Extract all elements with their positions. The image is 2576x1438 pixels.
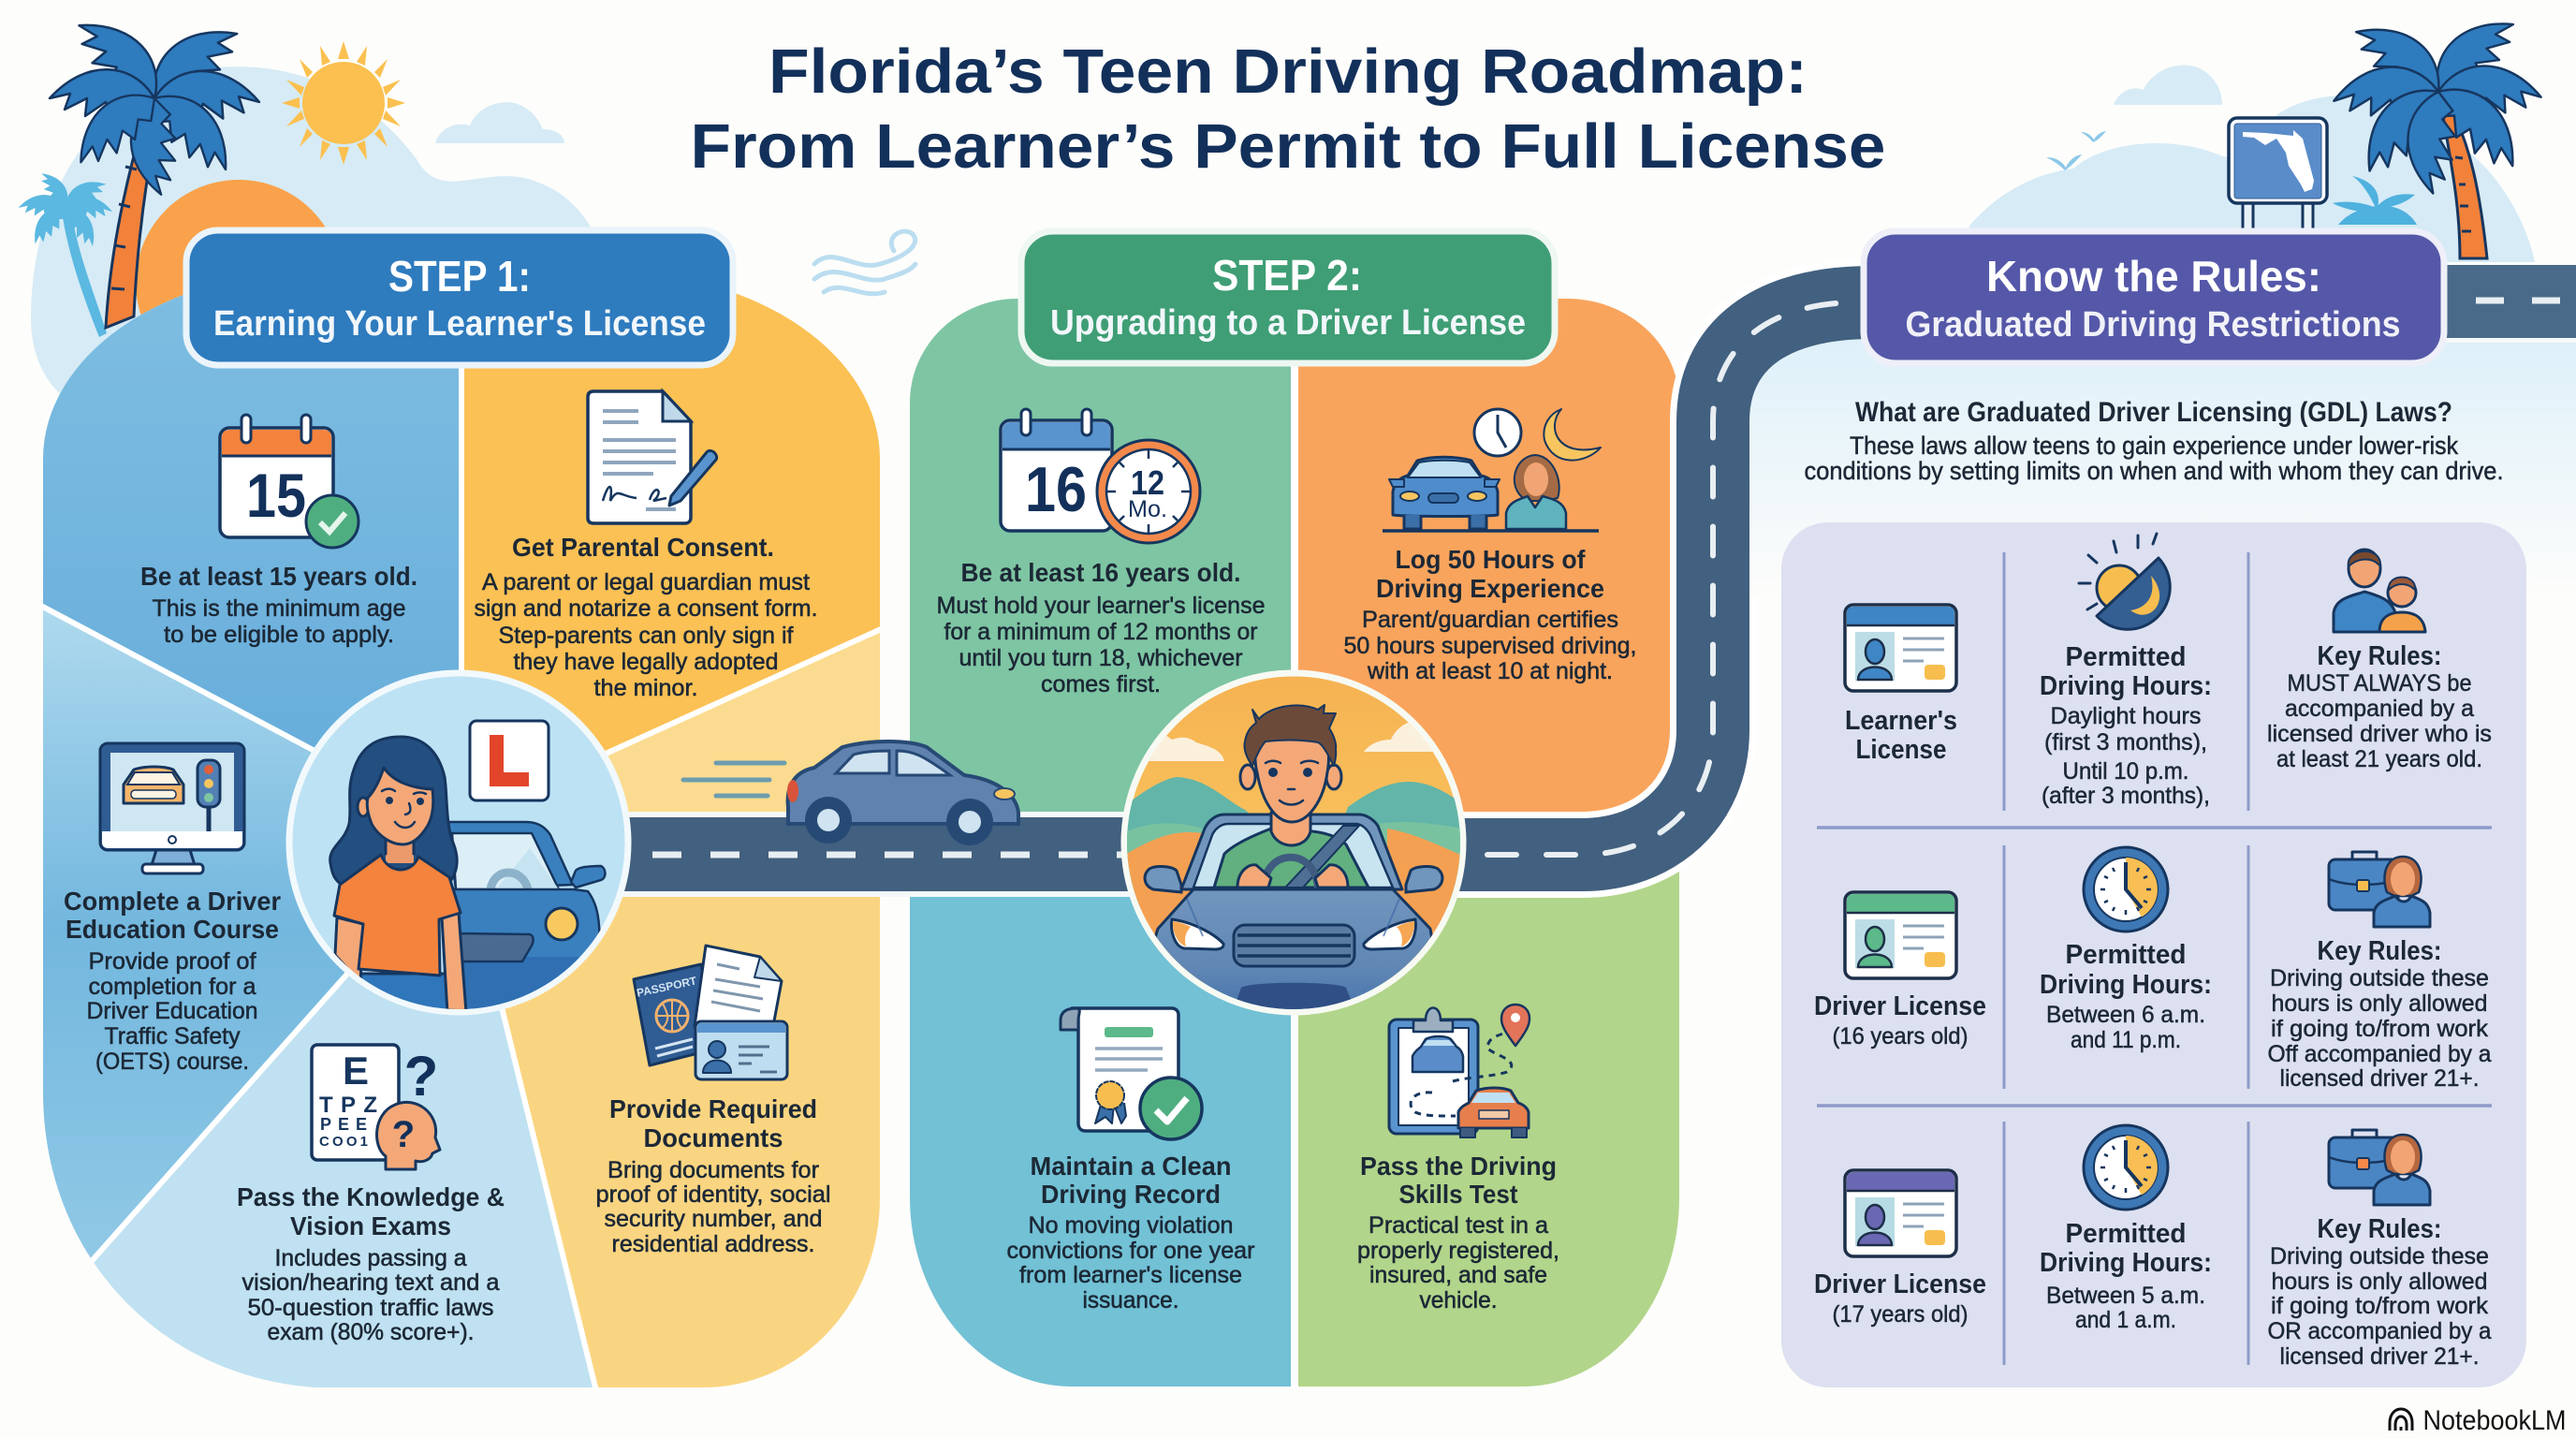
icon: briefcase and person — [2329, 852, 2430, 927]
row: learner's license: Daylight hours — [2050, 703, 2202, 729]
panel: step 2 quadrant background — [899, 290, 1688, 1398]
panel text and icon: driver education course: (OETS) course. — [95, 1049, 249, 1075]
panel text and icon: log 50 hours: 50 hours supervised driving, — [1344, 633, 1636, 659]
heading: know the rules: Graduated Driving Restrictions — [1906, 305, 2400, 345]
decoration: small cloud — [435, 102, 564, 143]
panel text and icon: driver education course: Complete a Driver — [64, 887, 281, 916]
panel text and icon: log 50 hours: with at least 10 at night. — [1367, 658, 1613, 684]
icon: sun and moon — [2079, 534, 2170, 629]
icon: computer monitor with car and traffic light — [100, 743, 244, 873]
icon: signed document with pen — [588, 391, 717, 523]
panel text and icon: driving skills test: vehicle. — [1419, 1287, 1498, 1313]
icon: purple license card — [1845, 1170, 1956, 1256]
decoration: orange setting sun — [136, 180, 342, 386]
icon: moving car with speed lines — [683, 741, 1018, 845]
row: driver license 17: Between 5 a.m. — [2046, 1283, 2205, 1309]
panel text and icon: be at least 16: Must hold your learner's license — [936, 593, 1266, 619]
row: driver license 17: OR accompanied by a — [2267, 1318, 2492, 1344]
icon: eye chart and head with question marks: TPZ — [319, 1093, 377, 1118]
heading: step 1: STEP 1: — [388, 252, 531, 301]
panel text and icon: required documents: Provide Required — [609, 1094, 817, 1123]
panel text and icon: be at least 16: for a minimum of 12 months or — [944, 619, 1258, 645]
panel text and icon: required documents: security number, and — [605, 1206, 822, 1232]
row: driver license 17: Driving Hours: — [2040, 1248, 2212, 1278]
icon: large palm tree right — [2332, 4, 2542, 258]
hub: teen girl with learner car — [289, 673, 628, 1020]
row: learner's license: (after 3 months), — [2042, 783, 2210, 809]
panel text and icon: driver education course: Provide proof of — [88, 948, 256, 975]
panel text and icon: driving skills test: Pass the Driving — [1360, 1152, 1557, 1181]
panel text and icon: knowledge and vision exams: vision/hearing text and a — [242, 1269, 500, 1296]
row: driver license 16: Driving Hours: — [2040, 970, 2212, 1000]
icon: small palm behind sign — [2333, 176, 2417, 225]
panel text and icon: knowledge and vision exams: Vision Exams — [290, 1211, 451, 1240]
panel text and icon: required documents: Bring documents for — [607, 1157, 819, 1183]
title: Florida’s Teen Driving Roadmap: — [768, 37, 1808, 107]
title: From Learner’s Permit to Full License — [691, 111, 1885, 182]
row: learner's license: (first 3 months), — [2044, 729, 2207, 756]
row: learner's license: licensed driver who is — [2267, 721, 2492, 747]
heading: step 2: Upgrading to a Driver License — [1050, 303, 1526, 343]
row: learner's license: Learner's — [1845, 706, 1957, 736]
row: learner's license: accompanied by a — [2285, 696, 2474, 722]
decoration: cloud — [2114, 66, 2222, 105]
car hood and front — [1155, 888, 1432, 1009]
text block: what are GDL laws — [1805, 397, 2503, 485]
icon: calendar 15 — [220, 415, 359, 548]
panel text and icon: parental consent: Step-parents can only sign if — [498, 623, 794, 649]
panel text and icon: driver education course: Driver Education — [86, 998, 258, 1024]
car behind the girl — [447, 822, 605, 1020]
icon: clipboard, route and cars — [1389, 1005, 1530, 1137]
icon: Florida road sign — [2229, 118, 2327, 233]
title — [691, 37, 1885, 182]
panel text and icon: be at least 16: comes first. — [1041, 671, 1161, 697]
panel text and icon: driver education course: Traffic Safety — [105, 1023, 241, 1049]
icon: eye chart and head with question marks: PEE — [320, 1115, 367, 1134]
panel text and icon: parental consent: the minor. — [593, 675, 698, 701]
row: driver license 17: Key Rules: — [2318, 1214, 2441, 1244]
road: exit to right edge — [2434, 265, 2576, 343]
row: driver license 17: hours is only allowed — [2271, 1269, 2488, 1295]
text block: what are GDL laws: These laws allow teens to gain experience under lower-risk — [1850, 432, 2458, 460]
panel: step 1 segmented background — [28, 262, 899, 1404]
row: driver license 17 — [1814, 1125, 2492, 1370]
row: driver license 17: and 1 a.m. — [2075, 1307, 2176, 1333]
icon: car, parent, clock and moon — [1383, 409, 1601, 531]
row: learner's license — [1845, 534, 2492, 809]
panel text and icon: parental consent: A parent or legal guardian must — [482, 569, 810, 595]
car windshield frame — [1181, 814, 1402, 889]
icon: passport, paper and ID card: PASSPORT — [636, 974, 698, 1000]
panel text and icon: knowledge and vision exams: Includes passing a — [275, 1245, 467, 1271]
icon: learner's license card — [1845, 605, 1956, 691]
panel: graduated restrictions table — [1781, 522, 2526, 1387]
icon: adult and child — [2334, 550, 2425, 632]
panel text and icon: knowledge and vision exams — [237, 1045, 505, 1345]
icon: eye chart and head with question marks: E — [343, 1049, 369, 1093]
icon: eye chart and head with question marks: ? — [404, 1045, 438, 1108]
panel text and icon: required documents — [595, 946, 831, 1257]
panel text and icon: required documents: Documents — [644, 1123, 783, 1152]
row: driver license 16: hours is only allowed — [2271, 990, 2488, 1017]
heading: step 2: STEP 2: — [1212, 251, 1362, 300]
decoration: top-left tropical scene — [19, 5, 599, 412]
panel text and icon: be at least 16: Be at least 16 years old. — [960, 558, 1241, 587]
girl figure — [330, 737, 466, 1020]
road border: curve edge — [1442, 302, 1872, 855]
row: driver license 16: Between 6 a.m. — [2046, 1002, 2205, 1028]
row: driver license 17: Driver License — [1814, 1269, 1986, 1299]
panel text and icon: be at least 16: until you turn 18, whichever — [959, 645, 1243, 671]
panel text and icon: clean driving record: No moving violation — [1028, 1212, 1234, 1239]
icon: L plate — [470, 721, 549, 800]
icon: clock 5 to 1 — [2084, 1125, 2168, 1210]
panel text and icon: clean driving record: convictions for one year — [1007, 1238, 1254, 1264]
panel text and icon: log 50 hours: Driving Experience — [1376, 574, 1604, 603]
row: driver license 17: Permitted — [2065, 1219, 2187, 1249]
panel text and icon: log 50 hours: Parent/guardian certifies — [1362, 607, 1618, 633]
row: learner's license: Permitted — [2065, 642, 2187, 672]
icon: eye chart and head with question marks — [312, 1045, 440, 1169]
panel text and icon: log 50 hours — [1344, 409, 1636, 684]
panel text and icon: clean driving record — [1007, 1008, 1254, 1313]
row: driver license 17: Driving outside these — [2270, 1243, 2489, 1269]
row: learner's license: Until 10 p.m. — [2063, 758, 2188, 785]
panel text and icon: driver education course: Education Course — [66, 915, 279, 944]
row: driver license 16: if going to/from work — [2271, 1016, 2489, 1042]
panel text and icon: be at least 15: Be at least 15 years old. — [140, 562, 417, 591]
row: learner's license: Driving Hours: — [2040, 671, 2212, 701]
icon: eye chart and head with question marks: ? — [392, 1114, 415, 1155]
row: driver license 16: Driver License — [1814, 991, 1986, 1021]
driver — [1214, 705, 1368, 888]
row: driver license 16: Off accompanied by a — [2267, 1041, 2492, 1067]
panel text and icon: knowledge and vision exams: exam (80% score+). — [268, 1319, 474, 1345]
row: learner's license: at least 21 years old. — [2276, 746, 2482, 772]
row: driver license 16: and 11 p.m. — [2071, 1027, 2181, 1053]
icon: calendar 16 and 12 month clock: Mo. — [1128, 496, 1167, 522]
panel text and icon: driving skills test — [1357, 1005, 1559, 1313]
panel text and icon: driving skills test: insured, and safe — [1369, 1262, 1547, 1288]
heading: step 2 — [1021, 231, 1555, 363]
panel text and icon: clean driving record: Driving Record — [1041, 1180, 1221, 1209]
icon: clock 6 to 11 — [2084, 847, 2168, 932]
panel text and icon: driver education course — [64, 743, 281, 1075]
icon: green license card — [1845, 892, 1956, 978]
panel text and icon: parental consent — [474, 391, 818, 701]
heading: know the rules — [1864, 231, 2444, 363]
road: curve up to the rules header — [1442, 302, 1872, 855]
panel text and icon: clean driving record: Maintain a Clean — [1030, 1152, 1232, 1181]
panel text and icon: parental consent: sign and notarize a consent form. — [474, 595, 818, 622]
row: driver license 16 — [1814, 847, 2492, 1092]
text block: what are GDL laws: conditions by setting limits on when and with whom they can drive. — [1805, 457, 2503, 485]
panel text and icon: log 50 hours: Log 50 Hours of — [1395, 545, 1586, 574]
row: driver license 16: licensed driver 21+. — [2280, 1065, 2479, 1092]
panel text and icon: parental consent: Get Parental Consent. — [512, 533, 774, 562]
row: learner's license: Key Rules: — [2318, 641, 2441, 671]
row: driver license 17: (17 years old) — [1833, 1301, 1968, 1328]
decoration: birds — [2046, 131, 2106, 170]
heading: step 1 — [186, 230, 733, 365]
icon: eye chart and head with question marks: COO1 — [319, 1134, 368, 1150]
icon: sun — [282, 41, 405, 165]
row: driver license 16: (16 years old) — [1833, 1023, 1968, 1049]
panel text and icon: required documents: proof of identity, social — [595, 1181, 831, 1208]
panel text and icon: knowledge and vision exams: 50-question traffic laws — [247, 1295, 494, 1321]
row: driver license 17: licensed driver 21+. — [2280, 1343, 2479, 1370]
panel text and icon: parental consent: they have legally adopted — [513, 649, 779, 675]
icon: calendar 15: 15 — [246, 461, 306, 530]
row: driver license 16: Key Rules: — [2318, 936, 2441, 966]
icon: calendar 16 and 12 month clock: 12 — [1131, 463, 1164, 502]
panel text and icon: clean driving record: from learner's license — [1019, 1262, 1242, 1288]
panel text and icon: driving skills test: Skills Test — [1398, 1180, 1518, 1209]
row: learner's license: License — [1855, 735, 1947, 765]
icon: calendar 16 and 12 month clock — [1001, 409, 1200, 543]
panel text and icon: required documents: residential address. — [612, 1231, 814, 1257]
hub: teen boy driving — [1123, 673, 1465, 1025]
icon: calendar 16 and 12 month clock: 16 — [1025, 454, 1087, 525]
row: learner's license: MUST ALWAYS be — [2288, 670, 2471, 697]
panel: know the rules soft background — [1732, 323, 2576, 599]
panel text and icon: knowledge and vision exams: Pass the Knowledge & — [237, 1182, 505, 1211]
decoration: top-right tropical scene — [1969, 4, 2542, 262]
panel text and icon: driving skills test: Practical test in a — [1368, 1212, 1548, 1239]
panel text and icon: be at least 15: This is the minimum age — [152, 595, 406, 622]
row: driver license 17: if going to/from work — [2271, 1293, 2489, 1319]
road: between step 1 and step 2 — [618, 812, 1142, 897]
icon: certificate with ribbon and check — [1061, 1008, 1202, 1139]
icon: small palm tree — [19, 167, 113, 337]
panel text and icon: driver education course: completion for a — [88, 974, 256, 1000]
panel text and icon: clean driving record: issuance. — [1082, 1287, 1179, 1313]
heading: know the rules: Know the Rules: — [1986, 252, 2321, 301]
panel text and icon: be at least 15 — [140, 415, 417, 648]
row: driver license 16: Driving outside these — [2270, 965, 2489, 991]
text block: what are GDL laws: What are Graduated Driver Licensing (GDL) Laws? — [1855, 397, 2452, 428]
panel text and icon: be at least 16 — [936, 409, 1266, 697]
panel text and icon: driving skills test: properly registered, — [1357, 1238, 1559, 1264]
icon: large palm tree — [50, 5, 260, 328]
row: driver license 16: Permitted — [2065, 940, 2187, 970]
icon: passport, paper and ID card — [634, 946, 787, 1079]
heading: step 1: Earning Your Learner's License — [213, 304, 706, 344]
panel text and icon: be at least 15: to be eligible to apply. — [164, 622, 394, 648]
decoration: wind lines — [814, 231, 915, 294]
icon: briefcase and person — [2329, 1130, 2430, 1205]
